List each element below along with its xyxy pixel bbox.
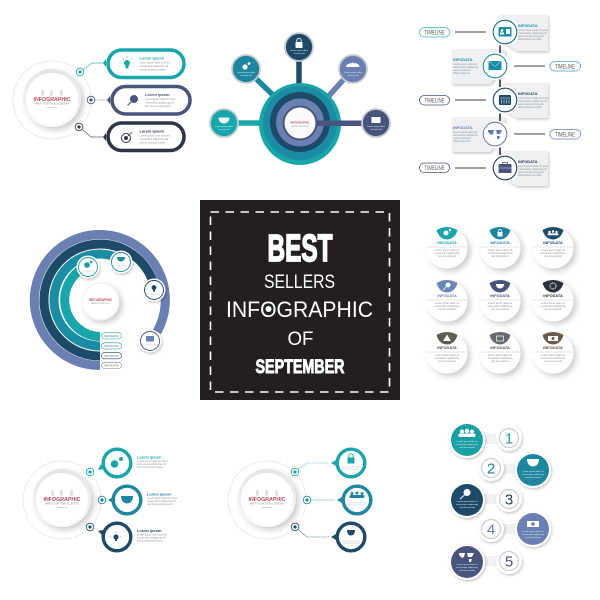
card 4: sed do eiusmod bbox=[438, 308, 456, 311]
step 4: sed do eiusmod bbox=[525, 537, 542, 539]
step 1: sed do eiusmod bbox=[459, 447, 476, 449]
connector dots bbox=[75, 68, 95, 131]
panel: numbered steps (bottom right) bbox=[449, 422, 551, 580]
row 4 bbox=[452, 117, 580, 152]
card 4: INFODATA bbox=[437, 293, 457, 298]
centre circle: WRITE YOUR TITLE bbox=[91, 303, 111, 305]
card 3: Lorem ipsum dolor sit bbox=[541, 249, 565, 252]
node: handshake: sit amet elit bbox=[218, 128, 230, 131]
step 5: 5 bbox=[505, 554, 513, 570]
ring: handshake bbox=[108, 486, 177, 514]
connector dots bbox=[86, 468, 106, 531]
timeline spine segments bbox=[499, 46, 501, 155]
row 4: TIMELINE bbox=[555, 132, 575, 138]
row 3 bbox=[420, 83, 548, 118]
card 5: INFODATA bbox=[490, 293, 510, 298]
ring: bulb: Lorem ipsum dolor sit amet bbox=[137, 534, 167, 536]
row 5: Lorem ipsum dolor sit amet bbox=[518, 165, 548, 168]
dark square bbox=[200, 200, 400, 400]
card 4: Lorem ipsum dolor sit bbox=[435, 302, 459, 305]
card 9: sed do eiusmod bbox=[544, 360, 562, 363]
card 5 bbox=[480, 280, 520, 322]
text: SEPTEMBER: SEPTEMBER bbox=[256, 357, 345, 378]
pill: slate: sed do eiusmod tempor bbox=[145, 105, 171, 108]
node: lock: sit amet elit bbox=[293, 52, 305, 55]
ring: gears: consectetur adipiscing elit bbox=[137, 463, 166, 466]
step 3 bbox=[449, 482, 522, 518]
row 4: officia deserunt bbox=[453, 140, 470, 143]
card 6: Lorem ipsum dolor sit bbox=[541, 302, 565, 305]
card 7: Lorem ipsum dolor sit bbox=[435, 354, 459, 357]
card 7: sed do eiusmod bbox=[438, 360, 456, 363]
pill: slate: consectetur adipiscing elit bbox=[145, 102, 174, 104]
node: gear: Lorem ipsum dolor bbox=[237, 71, 255, 74]
row 2 bbox=[452, 49, 580, 84]
centre circle: INFOGRAPHIC bbox=[89, 298, 112, 302]
card 7 bbox=[426, 332, 468, 374]
card 1: consectetur adipiscing bbox=[435, 252, 460, 255]
node: people: Lorem ipsum dolor bbox=[344, 71, 362, 74]
ring: handshake: Lorem ipsum dolor sit amet bbox=[147, 497, 177, 500]
legend pills: INFODATA bbox=[104, 354, 119, 358]
connector lines bbox=[298, 463, 335, 537]
card 8 bbox=[480, 332, 520, 374]
pill: dark: consectetur adipiscing elit bbox=[140, 138, 168, 141]
step 1: Lorem ipsum dolor sit bbox=[457, 440, 478, 443]
ring: people bbox=[337, 486, 371, 514]
card 3: sed do eiusmod bbox=[544, 255, 562, 258]
row 1: consectetur adipiscing elit bbox=[518, 32, 547, 35]
card 5: sed do eiusmod bbox=[491, 308, 509, 311]
main circle with INFOGRAPHIC label bbox=[13, 61, 91, 139]
card 7: INFODATA bbox=[437, 345, 457, 350]
card 3: INFODATA bbox=[543, 240, 563, 245]
pill: teal: Lorem ipsum bbox=[140, 56, 164, 60]
row 2: sed do eiusmod bbox=[453, 69, 471, 72]
main circle with INFOGRAPHIC label: WRITE YOUR TITLE & CONTENT bbox=[35, 102, 69, 106]
card 1: sed do eiusmod bbox=[438, 255, 456, 258]
card 2 bbox=[480, 227, 520, 268]
ring: handshake: Lorem ipsum bbox=[147, 492, 172, 496]
step 3: Lorem ipsum dolor sit bbox=[457, 500, 478, 503]
row 4: consectetur adipiscing bbox=[453, 134, 478, 137]
ring: bulb: Lorem ipsum bbox=[137, 528, 162, 533]
legend pills: INFODATA bbox=[104, 334, 119, 338]
step 3: consectetur adipiscing bbox=[456, 503, 479, 506]
heading: BEST: BEST bbox=[268, 228, 332, 270]
step 4: 4 bbox=[487, 522, 495, 538]
pill: dark bbox=[103, 123, 184, 150]
row 4: Lorem ipsum dolor sit bbox=[453, 131, 477, 134]
step 5: Lorem ipsum dolor sit bbox=[457, 563, 478, 566]
step 5: sed do eiusmod bbox=[459, 570, 476, 572]
icon: target dot inside the letter O bbox=[266, 306, 272, 312]
card 9 bbox=[532, 332, 574, 374]
row 2: officia deserunt bbox=[453, 72, 470, 75]
panel: nine info cards (middle right) bbox=[426, 227, 574, 374]
step 4: consectetur adipiscing bbox=[522, 533, 545, 536]
row 5 bbox=[420, 151, 548, 186]
node: screen bbox=[362, 109, 390, 137]
pill: teal: consectetur adipiscing elit bbox=[140, 65, 168, 68]
card 6: consectetur adipiscing bbox=[541, 305, 566, 308]
pill: dark: Lorem ipsum bbox=[140, 128, 164, 134]
row 5: TIMELINE bbox=[424, 166, 444, 172]
row 2: Lorem ipsum dolor sit bbox=[453, 63, 477, 66]
connector dots bbox=[291, 468, 311, 531]
ring: bulb: consectetur adipiscing elit bbox=[137, 536, 166, 540]
row 5: INFODATA bbox=[518, 159, 538, 164]
pill: slate: Lorem ipsum bbox=[145, 92, 170, 97]
card 6: INFODATA bbox=[543, 293, 563, 298]
ring: handshake: consectetur adipiscing elit bbox=[147, 500, 176, 503]
text: SELLERS: SELLERS bbox=[264, 271, 335, 293]
node: people: sit amet elit bbox=[347, 74, 359, 77]
row 3: INFODATA bbox=[518, 91, 538, 96]
row 3: officia deserunt mollit bbox=[518, 106, 542, 109]
ring: gears bbox=[98, 449, 167, 477]
main circle with INFOGRAPHIC label: INFOGRAPHIC bbox=[248, 497, 286, 503]
node: people bbox=[339, 55, 367, 83]
main circle with INFOGRAPHIC label: ** ** ** ** bbox=[262, 507, 272, 510]
dashed stitched border bbox=[210, 212, 390, 392]
panel: central title badge bbox=[200, 200, 400, 400]
centre circle bbox=[82, 282, 120, 320]
row 3: Lorem ipsum dolor sit amet bbox=[518, 97, 548, 100]
card 8: consectetur adipiscing bbox=[488, 357, 513, 360]
pill: teal: Lorem ipsum dolor sit amet bbox=[140, 62, 170, 64]
step 2: sed do eiusmod bbox=[525, 477, 542, 479]
panel: spiral arc chart (middle left) bbox=[34, 235, 166, 368]
step 2: Lorem ipsum dolor sit bbox=[523, 470, 544, 473]
main circle with INFOGRAPHIC label bbox=[23, 461, 101, 539]
node: gear: Lorem ipsum bbox=[82, 270, 94, 272]
row 5: officia deserunt mollit bbox=[518, 174, 542, 177]
card 6: sed do eiusmod bbox=[544, 308, 562, 311]
step 2: consectetur adipiscing bbox=[522, 473, 545, 476]
main circle with INFOGRAPHIC label: WRITE YOUR TITLE & CONTENT bbox=[45, 502, 79, 506]
connector bands bbox=[480, 434, 520, 566]
ring: bulb: sed do eiusmod tempor bbox=[137, 540, 163, 542]
pill: teal: sed do eiusmod tempor bbox=[140, 68, 166, 72]
panel: timeline (top right) bbox=[420, 15, 580, 186]
card 8: Lorem ipsum dolor sit bbox=[488, 354, 512, 357]
pill: teal bbox=[103, 50, 184, 78]
node: handshake: Lorem ipsum bbox=[115, 264, 127, 267]
card 6 bbox=[532, 280, 574, 322]
row 3: TIMELINE bbox=[424, 98, 444, 104]
row 2: INFODATA bbox=[453, 57, 473, 62]
main circle with INFOGRAPHIC label: WRITE YOUR TITLE & CONTENT bbox=[250, 502, 284, 506]
concentric rings: INFOGRAPHIC bbox=[290, 120, 310, 124]
main circle with INFOGRAPHIC label: INFOGRAPHIC bbox=[34, 97, 71, 103]
ring: handshake bbox=[331, 523, 365, 551]
card 5: Lorem ipsum dolor sit bbox=[488, 302, 512, 305]
pill: slate: Lorem ipsum dolor sit amet bbox=[145, 98, 175, 101]
step 5 bbox=[449, 544, 522, 580]
card 4: consectetur adipiscing bbox=[435, 305, 460, 308]
pill: dark: sed do eiusmod tempor bbox=[140, 142, 166, 144]
card 4 bbox=[426, 280, 468, 322]
card 2: consectetur adipiscing bbox=[488, 252, 513, 255]
row 3: sed do eiusmod tempor bbox=[518, 103, 544, 106]
node: gear bbox=[232, 55, 260, 83]
step 4: Lorem ipsum dolor sit bbox=[523, 530, 544, 533]
card 1: INFODATA bbox=[437, 240, 457, 245]
node: screen: Lorem ipsum bbox=[144, 344, 156, 346]
node: lock: Lorem ipsum dolor bbox=[290, 49, 308, 52]
step 3: 3 bbox=[505, 492, 513, 508]
card 2: INFODATA bbox=[490, 240, 510, 245]
panel: radial hub diagram (top centre) bbox=[210, 33, 390, 165]
panel: three-pill infographic (top left) bbox=[13, 50, 190, 150]
legend pills: INFODATA bbox=[104, 364, 119, 368]
hub spokes bbox=[224, 47, 353, 123]
row 1: sed do eiusmod tempor bbox=[518, 35, 544, 38]
card 5: consectetur adipiscing bbox=[488, 305, 513, 308]
text: OF: OF bbox=[288, 328, 314, 350]
node: handshake: Lorem ipsum dolor bbox=[215, 125, 233, 128]
ring: bulb bbox=[98, 523, 167, 551]
panel: three-ring infographic with icons (bottom centre) bbox=[228, 449, 371, 551]
card 9: consectetur adipiscing bbox=[541, 357, 566, 360]
row 4: INFODATA bbox=[453, 125, 473, 130]
card 3: consectetur adipiscing bbox=[541, 252, 566, 255]
node: screen: Lorem ipsum dolor bbox=[367, 125, 385, 128]
concentric rings: WRITE YOUR TITLE bbox=[292, 126, 309, 128]
panel: three-ring infographic with text (bottom left) bbox=[23, 449, 177, 551]
row 1: TIMELINE bbox=[424, 30, 444, 36]
step 2 bbox=[478, 452, 551, 488]
step 1: consectetur adipiscing bbox=[456, 443, 479, 446]
card 9: INFODATA bbox=[543, 345, 563, 350]
legend pills: INFODATA bbox=[104, 344, 119, 348]
ring: gears: Lorem ipsum dolor sit amet bbox=[137, 460, 167, 463]
row 2: TIMELINE bbox=[555, 64, 575, 70]
main circle with INFOGRAPHIC label: ** ** ** ** bbox=[57, 507, 67, 510]
row 1: Lorem ipsum dolor sit amet bbox=[518, 29, 548, 32]
ring: gears: sed do eiusmod tempor bbox=[137, 466, 163, 469]
text: INFOGRAPHIC: INFOGRAPHIC bbox=[226, 297, 373, 322]
node: lock bbox=[285, 33, 313, 61]
card 1 bbox=[426, 227, 468, 268]
card 2: sed do eiusmod bbox=[491, 255, 509, 258]
pill: slate bbox=[107, 86, 190, 114]
main circle with INFOGRAPHIC label: INFOGRAPHIC bbox=[44, 497, 81, 503]
node: handshake bbox=[210, 109, 238, 137]
row 2: consectetur adipiscing bbox=[453, 66, 478, 69]
legend pills bbox=[102, 333, 122, 368]
step 4 bbox=[478, 511, 551, 547]
row 1 bbox=[420, 15, 548, 51]
card 8: INFODATA bbox=[490, 345, 510, 350]
node: screen: sit amet elit bbox=[370, 128, 382, 131]
card 1: Lorem ipsum dolor sit bbox=[435, 249, 459, 252]
step 1 bbox=[449, 422, 522, 458]
step 5: consectetur adipiscing bbox=[456, 566, 479, 569]
ring: handshake: sed do eiusmod tempor bbox=[147, 503, 173, 506]
step 3: sed do eiusmod bbox=[459, 507, 476, 509]
step 2: 2 bbox=[487, 460, 495, 478]
card 2: Lorem ipsum dolor sit bbox=[488, 249, 512, 252]
row 1: INFODATA bbox=[518, 23, 538, 28]
card 9: Lorem ipsum dolor sit bbox=[541, 354, 565, 357]
card 7: consectetur adipiscing bbox=[435, 357, 460, 360]
ring: gears: Lorem ipsum bbox=[137, 454, 162, 460]
card 3 bbox=[532, 227, 574, 268]
row 5: consectetur adipiscing elit bbox=[518, 168, 547, 171]
pill: dark: Lorem ipsum dolor sit amet bbox=[140, 134, 170, 138]
card 8: sed do eiusmod bbox=[491, 360, 509, 363]
row 4: sed do eiusmod bbox=[453, 137, 471, 140]
step 1: 1 bbox=[505, 430, 513, 448]
ring: lock bbox=[331, 449, 365, 477]
node: gear: sit amet elit bbox=[240, 74, 252, 77]
node: bulb: Lorem ipsum bbox=[148, 293, 160, 296]
main circle with INFOGRAPHIC label bbox=[228, 461, 306, 539]
row 5: sed do eiusmod tempor bbox=[518, 171, 544, 174]
concentric arcs bbox=[34, 235, 165, 366]
connector lines bbox=[82, 63, 110, 137]
concentric rings bbox=[259, 83, 376, 165]
row 1: officia deserunt mollit bbox=[518, 38, 542, 41]
row 3: consectetur adipiscing elit bbox=[518, 100, 547, 103]
main circle with INFOGRAPHIC label: ** ** ** ** bbox=[47, 107, 57, 110]
